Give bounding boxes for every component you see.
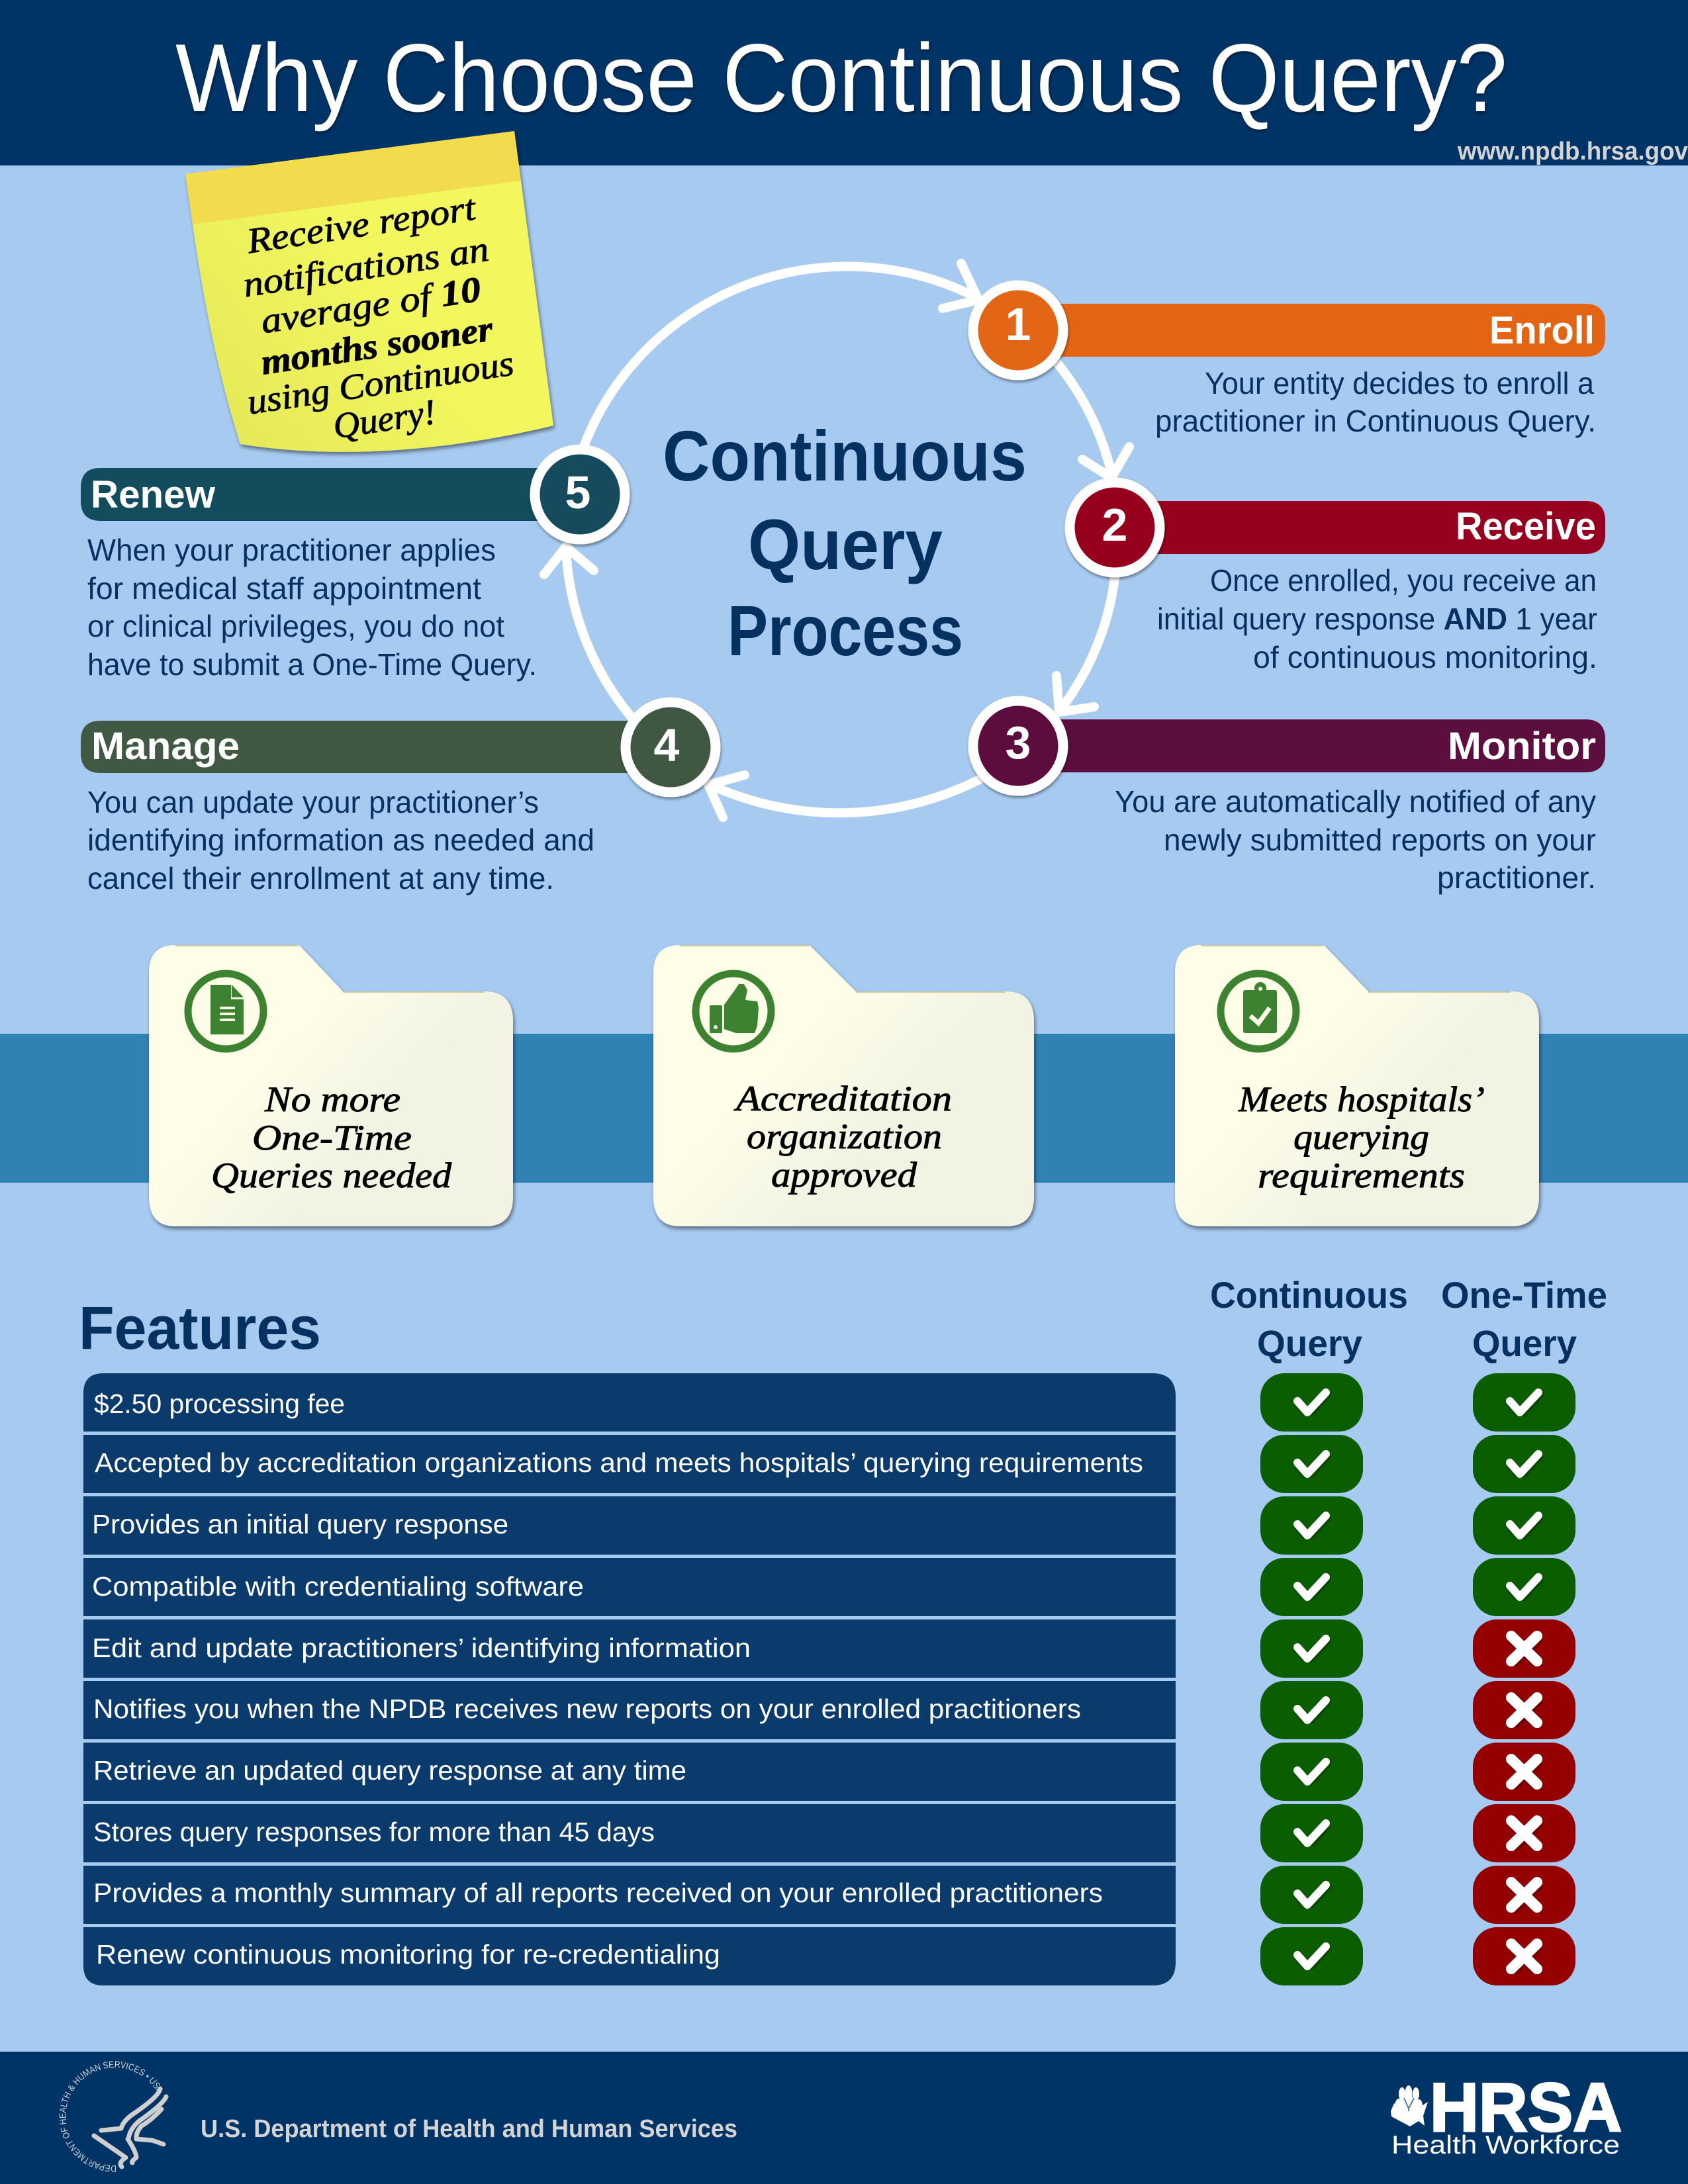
features table [83,1373,1176,1985]
step 2: receive: 2 [1102,499,1127,551]
features table: $2.50 processing fee [94,1388,345,1419]
sticky note callout: using Continuous [244,343,516,422]
step 1: enroll [973,285,1605,438]
center heading: Continuous [663,416,1027,496]
step 4: manage: cancel their enrollment at any time. [87,861,554,895]
folder: accreditation organization approved: Accreditation [734,1079,952,1118]
folder: no more one-time queries [149,945,513,1226]
step 3: monitor [973,701,1605,895]
step 2: receive: of continuous monitoring. [1253,640,1597,674]
hhs name: U.S. Department of Health and Human Services [201,2115,737,2143]
step 3: monitor: newly submitted reports on your [1164,823,1596,857]
features table: Provides a monthly summary of all reports received on your enrolled practitioners [93,1878,1103,1908]
blue band behind folders [0,1034,1688,1183]
step 4: manage: You can update your practitioner’s [87,785,539,819]
column heading: one-time query: One-Time [1441,1274,1607,1316]
icon: HHS seal: DEPARTMENT OF HEALTH & HUMAN SERVICES • USA [60,2061,163,2172]
folder: accreditation organization approved: approved [771,1155,917,1195]
sticky note callout: Receive report [244,187,479,261]
folder: accreditation organization approved: organization [747,1116,942,1156]
sticky note callout: average of 10 [258,269,483,341]
step 5: renew: 5 [565,467,590,518]
center heading: Query [748,504,943,584]
icon: clipboard check [1221,974,1296,1049]
step 1: enroll: Enroll [1489,309,1595,352]
icon: hand and map [1391,2085,1428,2126]
step 5: renew: When your practitioner applies [87,533,496,567]
step 2: receive: Once enrolled, you receive an [1210,563,1597,598]
header banner [0,0,1688,165]
folder: no more one-time queries: One-Time [252,1118,412,1158]
column heading: one-time query: Query [1472,1322,1577,1364]
continuous query checks [1260,1373,1363,1985]
folder: meets hospitals' querying requirements: requirements [1258,1156,1465,1195]
features table: Edit and update practitioners’ identifying information [92,1633,751,1663]
center heading: Process [727,590,963,670]
step 1: enroll: Your entity decides to enroll a [1205,366,1594,400]
step 1: enroll: practitioner in Continuous Query. [1155,404,1596,438]
folder: accreditation organization approved [653,945,1034,1226]
step 5: renew: or clinical privileges, you do not [87,609,504,643]
sticky note callout: notifications an [240,229,491,304]
folder: meets hospitals' querying requirements: querying [1293,1117,1429,1157]
step 3: monitor: practitioner. [1437,860,1596,895]
folder: no more one-time queries: No more [264,1079,400,1119]
features table: Stores query responses for more than 45 days [93,1817,655,1847]
step 2: receive: initial query response AND 1 year [1157,602,1597,636]
one-time query checks and crosses [1473,1373,1575,1985]
step 3: monitor: 3 [1006,717,1031,768]
features heading: Features [79,1295,321,1362]
folder: meets hospitals' querying requirements [1175,945,1539,1226]
step 2: receive: Receive [1456,505,1596,548]
features table: Renew continuous monitoring for re-credentialing [96,1939,720,1970]
step 2: receive [1070,482,1605,674]
step 5: renew: have to submit a One-Time Query. [87,647,537,682]
sticky note callout: months sooner [258,308,496,383]
process cycle arrows [544,263,1129,817]
features table: Provides an initial query response [92,1509,508,1539]
sticky note callout: Query! [330,392,438,446]
features table: Compatible with credentialing software [92,1571,584,1602]
column heading: one-time query [1441,1274,1607,1364]
footer banner [0,2052,1688,2184]
icon: thumbs up [696,974,771,1049]
step 4: manage: Manage [91,725,240,768]
column heading: continuous query: Continuous [1210,1274,1408,1316]
column heading: continuous query [1210,1274,1408,1364]
center heading [663,416,1027,670]
step 1: enroll: 1 [1006,298,1031,350]
step 5: renew [81,449,625,682]
step 4: manage [81,702,716,895]
icon: document [188,974,263,1049]
features table: Retrieve an updated query response at any time [93,1755,686,1786]
folder: no more one-time queries: Queries needed [211,1156,452,1195]
folder: meets hospitals' querying requirements: Meets hospitals’ [1238,1079,1485,1119]
features table: Notifies you when the NPDB receives new reports on your enrolled practitioners [93,1694,1081,1724]
features table: Accepted by accreditation organizations and meets hospitals’ querying requirements [95,1447,1143,1478]
hrsa logo: Health Workforce [1391,2131,1620,2160]
step 5: renew: Renew [91,473,216,516]
step 4: manage: 4 [654,719,680,771]
step 5: renew: for medical staff appointment [87,571,481,606]
title: Why Choose Continuous Query? [175,24,1507,132]
step 3: monitor: You are automatically notified of any [1115,784,1596,819]
sticky note callout [185,131,553,452]
column heading: continuous query: Query [1257,1322,1362,1364]
hrsa logo: HRSA [1430,2070,1622,2146]
step 4: manage: identifying information as needed and [87,823,594,857]
step 3: monitor: Monitor [1448,725,1596,768]
